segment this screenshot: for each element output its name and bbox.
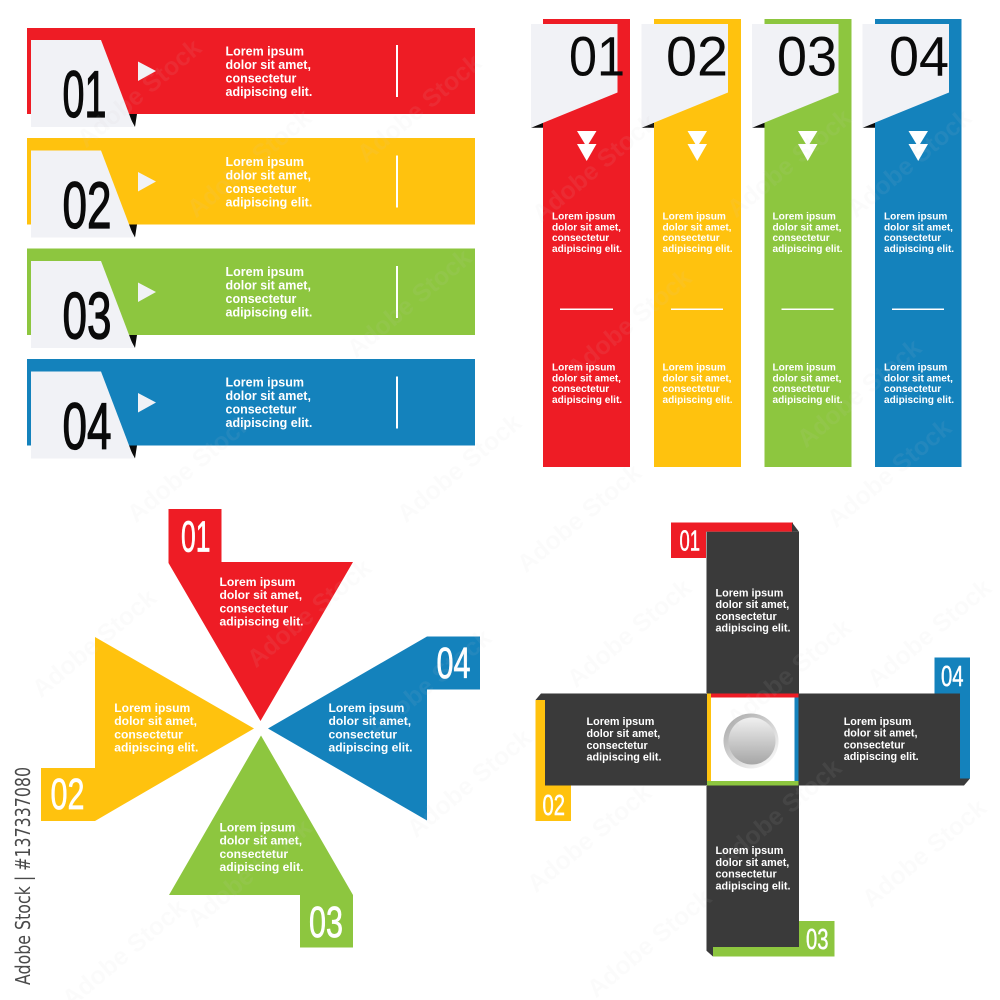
text: Adobe Stock xyxy=(182,104,317,223)
banner 01: Lorem ipsum xyxy=(226,44,304,58)
text: Adobe Stock xyxy=(522,779,657,898)
column 04: Lorem ipsum xyxy=(884,362,947,374)
text: Adobe Stock xyxy=(242,554,377,673)
column 02: Lorem ipsum xyxy=(662,212,726,222)
text: Adobe Stock xyxy=(712,754,847,873)
column 04: Lorem ipsum xyxy=(884,212,947,222)
arm left: consectetur xyxy=(586,740,648,752)
tab 03 xyxy=(706,921,834,956)
banner 01: dolor sit amet, xyxy=(226,58,311,72)
text: Adobe Stock xyxy=(722,104,857,223)
text: Adobe Stock xyxy=(512,459,647,578)
banner 02: Lorem ipsum xyxy=(226,155,304,169)
tab 02: 02 xyxy=(542,790,565,822)
arm bottom: dolor sit amet, xyxy=(716,857,789,869)
pinwheel blade 03: consectetur xyxy=(220,847,288,861)
text: Adobe Stock xyxy=(722,614,857,733)
column 03: dolor sit amet, xyxy=(772,222,842,233)
text: Adobe Stock xyxy=(562,264,697,383)
banner 04: dolor sit amet, xyxy=(226,389,311,403)
text: Adobe Stock xyxy=(527,109,662,228)
column 03: Lorem ipsum xyxy=(772,362,836,374)
banner 04: 04 xyxy=(62,389,112,463)
column 04: consectetur xyxy=(884,384,941,395)
column 01: Lorem ipsum xyxy=(552,362,615,374)
arm top: adipiscing elit. xyxy=(716,622,790,634)
column 03: dolor sit amet, xyxy=(772,373,842,384)
text: Adobe Stock xyxy=(512,459,647,578)
text: Adobe Stock xyxy=(792,334,927,453)
text: Adobe Stock xyxy=(562,574,697,693)
banner 01: 01 xyxy=(62,57,106,131)
text: Adobe Stock xyxy=(242,554,377,673)
text: Adobe Stock xyxy=(842,104,977,223)
text: Adobe Stock xyxy=(392,409,527,528)
arm right: dolor sit amet, xyxy=(844,728,917,740)
text: Adobe Stock xyxy=(792,334,927,453)
banner 03: 03 xyxy=(62,278,112,352)
tab 04: 04 xyxy=(941,661,964,693)
column 02: consectetur xyxy=(662,233,720,244)
column 03: consectetur xyxy=(772,233,830,244)
pinwheel blade 02: 02 xyxy=(50,770,84,819)
text: Adobe Stock xyxy=(582,884,717,1000)
arm bottom: Lorem ipsum xyxy=(716,845,783,857)
arm left: adipiscing elit. xyxy=(586,752,662,764)
panel: pinwheel xyxy=(41,509,480,948)
banner 02: consectetur xyxy=(226,182,296,196)
arm left: dolor sit amet, xyxy=(586,728,660,740)
column 01: adipiscing elit. xyxy=(552,395,622,406)
banner 03: dolor sit amet, xyxy=(226,278,311,292)
pinwheel blade 01: dolor sit amet, xyxy=(220,588,302,602)
column 02: adipiscing elit. xyxy=(662,395,733,406)
column 02: Lorem ipsum xyxy=(662,362,726,374)
text: Adobe Stock xyxy=(27,584,162,703)
text: Adobe Stock xyxy=(822,414,957,533)
pinwheel blade 01: Lorem ipsum xyxy=(220,575,295,589)
text: Adobe Stock xyxy=(857,794,992,913)
text: Adobe Stock xyxy=(527,109,662,228)
text: Adobe Stock xyxy=(522,779,657,898)
pinwheel blade 01: adipiscing elit. xyxy=(220,614,304,628)
column 01: dolor sit amet, xyxy=(552,373,621,384)
pinwheel blade 03: adipiscing elit. xyxy=(220,860,304,874)
column 03: Lorem ipsum xyxy=(772,212,836,222)
arm bottom: consectetur xyxy=(716,868,778,880)
text: Adobe Stock xyxy=(362,624,497,743)
pinwheel blade 03: 03 xyxy=(309,898,343,947)
text: Adobe Stock xyxy=(862,574,997,693)
text: Adobe Stock xyxy=(722,614,857,733)
text: Adobe Stock xyxy=(392,409,527,528)
banner 03: Lorem ipsum xyxy=(226,265,304,279)
column 02: 02 xyxy=(666,24,728,88)
text: Adobe Stock xyxy=(842,104,977,223)
arm right: Lorem ipsum xyxy=(844,716,911,728)
arm bottom: adipiscing elit. xyxy=(716,880,790,892)
pinwheel blade 02: Lorem ipsum xyxy=(114,701,190,715)
banner 04: consectetur xyxy=(226,402,296,416)
panel: dark cross xyxy=(536,522,970,956)
pinwheel blade 03 xyxy=(169,736,353,948)
stock credit: Adobe Stock | #137337080 xyxy=(11,767,35,985)
pinwheel blade 04: 04 xyxy=(436,639,470,688)
text: Adobe Stock xyxy=(72,34,207,153)
arm top: dolor sit amet, xyxy=(716,599,789,611)
arm right: consectetur xyxy=(844,739,906,751)
banner 01 xyxy=(27,28,475,131)
column 04: 04 xyxy=(889,24,949,88)
arm top: consectetur xyxy=(716,611,778,623)
banner 01: adipiscing elit. xyxy=(226,85,312,99)
center box with knob xyxy=(707,694,798,786)
column 02: consectetur xyxy=(662,384,720,395)
text: Adobe Stock xyxy=(582,884,717,1000)
pinwheel blade 04: consectetur xyxy=(328,727,397,741)
banner 02: 02 xyxy=(62,168,112,242)
pinwheel blade 04: Lorem ipsum xyxy=(328,701,404,715)
text: Adobe Stock xyxy=(857,794,992,913)
column 03 xyxy=(752,19,852,467)
text: Adobe Stock xyxy=(862,574,997,693)
arm top: Lorem ipsum xyxy=(716,587,783,599)
text: Adobe Stock xyxy=(122,409,257,528)
arm left: Lorem ipsum xyxy=(586,716,654,728)
text: Adobe Stock xyxy=(352,49,487,168)
panel: vertical columns xyxy=(531,19,962,467)
column 04: adipiscing elit. xyxy=(884,395,954,406)
arm right xyxy=(798,694,960,786)
text: Adobe Stock xyxy=(182,814,317,933)
pinwheel blade 03: Lorem ipsum xyxy=(220,820,295,834)
banner 02: adipiscing elit. xyxy=(226,196,312,210)
text: Adobe Stock xyxy=(352,49,487,168)
column 04: consectetur xyxy=(884,233,941,244)
tab 04 xyxy=(934,658,970,786)
text: Adobe Stock xyxy=(182,104,317,223)
text: Adobe Stock xyxy=(402,724,537,843)
pinwheel blade 02: adipiscing elit. xyxy=(114,740,198,754)
pinwheel blade 04: adipiscing elit. xyxy=(328,740,413,754)
text: Adobe Stock xyxy=(722,104,857,223)
column 01: 01 xyxy=(569,24,625,88)
pinwheel blade 02: dolor sit amet, xyxy=(114,714,197,728)
arm top xyxy=(706,532,799,694)
tab 01: 01 xyxy=(680,526,700,558)
text: Adobe Stock xyxy=(182,814,317,933)
column 03: adipiscing elit. xyxy=(772,395,843,406)
column 04: dolor sit amet, xyxy=(884,373,953,384)
tab 03: 03 xyxy=(806,924,828,956)
tab 01 xyxy=(671,522,799,558)
column 01 xyxy=(531,19,630,467)
pinwheel blade 03: dolor sit amet, xyxy=(220,834,302,848)
pinwheel blade 01: 01 xyxy=(181,513,210,562)
banner 03 xyxy=(27,248,475,352)
pinwheel blade 02 xyxy=(41,637,254,821)
text: Adobe Stock xyxy=(122,409,257,528)
column 03: 03 xyxy=(777,24,837,88)
column 01: dolor sit amet, xyxy=(552,222,621,233)
text: Adobe Stock xyxy=(342,244,477,363)
column 02 xyxy=(642,19,741,467)
text: Adobe Stock xyxy=(342,244,477,363)
pinwheel blade 01: consectetur xyxy=(220,601,288,615)
column 04 xyxy=(862,19,962,467)
banner 02 xyxy=(27,138,475,242)
column 03: consectetur xyxy=(772,384,830,395)
arm bottom xyxy=(706,785,799,950)
panel: horizontal banners xyxy=(27,28,475,463)
banner 01: consectetur xyxy=(226,72,296,86)
column 02: dolor sit amet, xyxy=(662,373,732,384)
pinwheel blade 04: dolor sit amet, xyxy=(328,714,411,728)
column 04: dolor sit amet, xyxy=(884,222,953,233)
pinwheel blade 01 xyxy=(168,509,353,721)
arm left xyxy=(541,693,707,786)
text: Adobe Stock xyxy=(72,34,207,153)
text: Adobe Stock xyxy=(562,574,697,693)
banner 04: Lorem ipsum xyxy=(226,376,304,390)
tab 02 xyxy=(536,694,571,822)
banner 04: adipiscing elit. xyxy=(226,416,312,430)
column 03: adipiscing elit. xyxy=(772,244,843,255)
column 02: dolor sit amet, xyxy=(662,222,732,233)
banner 04 xyxy=(27,359,475,463)
banner 03: consectetur xyxy=(226,292,296,306)
text: Adobe Stock xyxy=(402,724,537,843)
text: Adobe Stock xyxy=(712,754,847,873)
pinwheel blade 04 xyxy=(268,636,480,820)
banner 03: adipiscing elit. xyxy=(226,306,312,320)
text: Adobe Stock xyxy=(822,414,957,533)
column 01: adipiscing elit. xyxy=(552,244,622,255)
banner 02: dolor sit amet, xyxy=(226,168,311,182)
column 01: consectetur xyxy=(552,233,609,244)
text: Adobe Stock xyxy=(562,264,697,383)
column 01: consectetur xyxy=(552,384,609,395)
pinwheel blade 02: consectetur xyxy=(114,727,183,741)
arm right: adipiscing elit. xyxy=(844,751,919,763)
column 01: Lorem ipsum xyxy=(552,212,615,222)
text: Adobe Stock xyxy=(362,624,497,743)
column 04: adipiscing elit. xyxy=(884,244,954,255)
text: Adobe Stock xyxy=(27,584,162,703)
column 02: adipiscing elit. xyxy=(662,244,733,255)
